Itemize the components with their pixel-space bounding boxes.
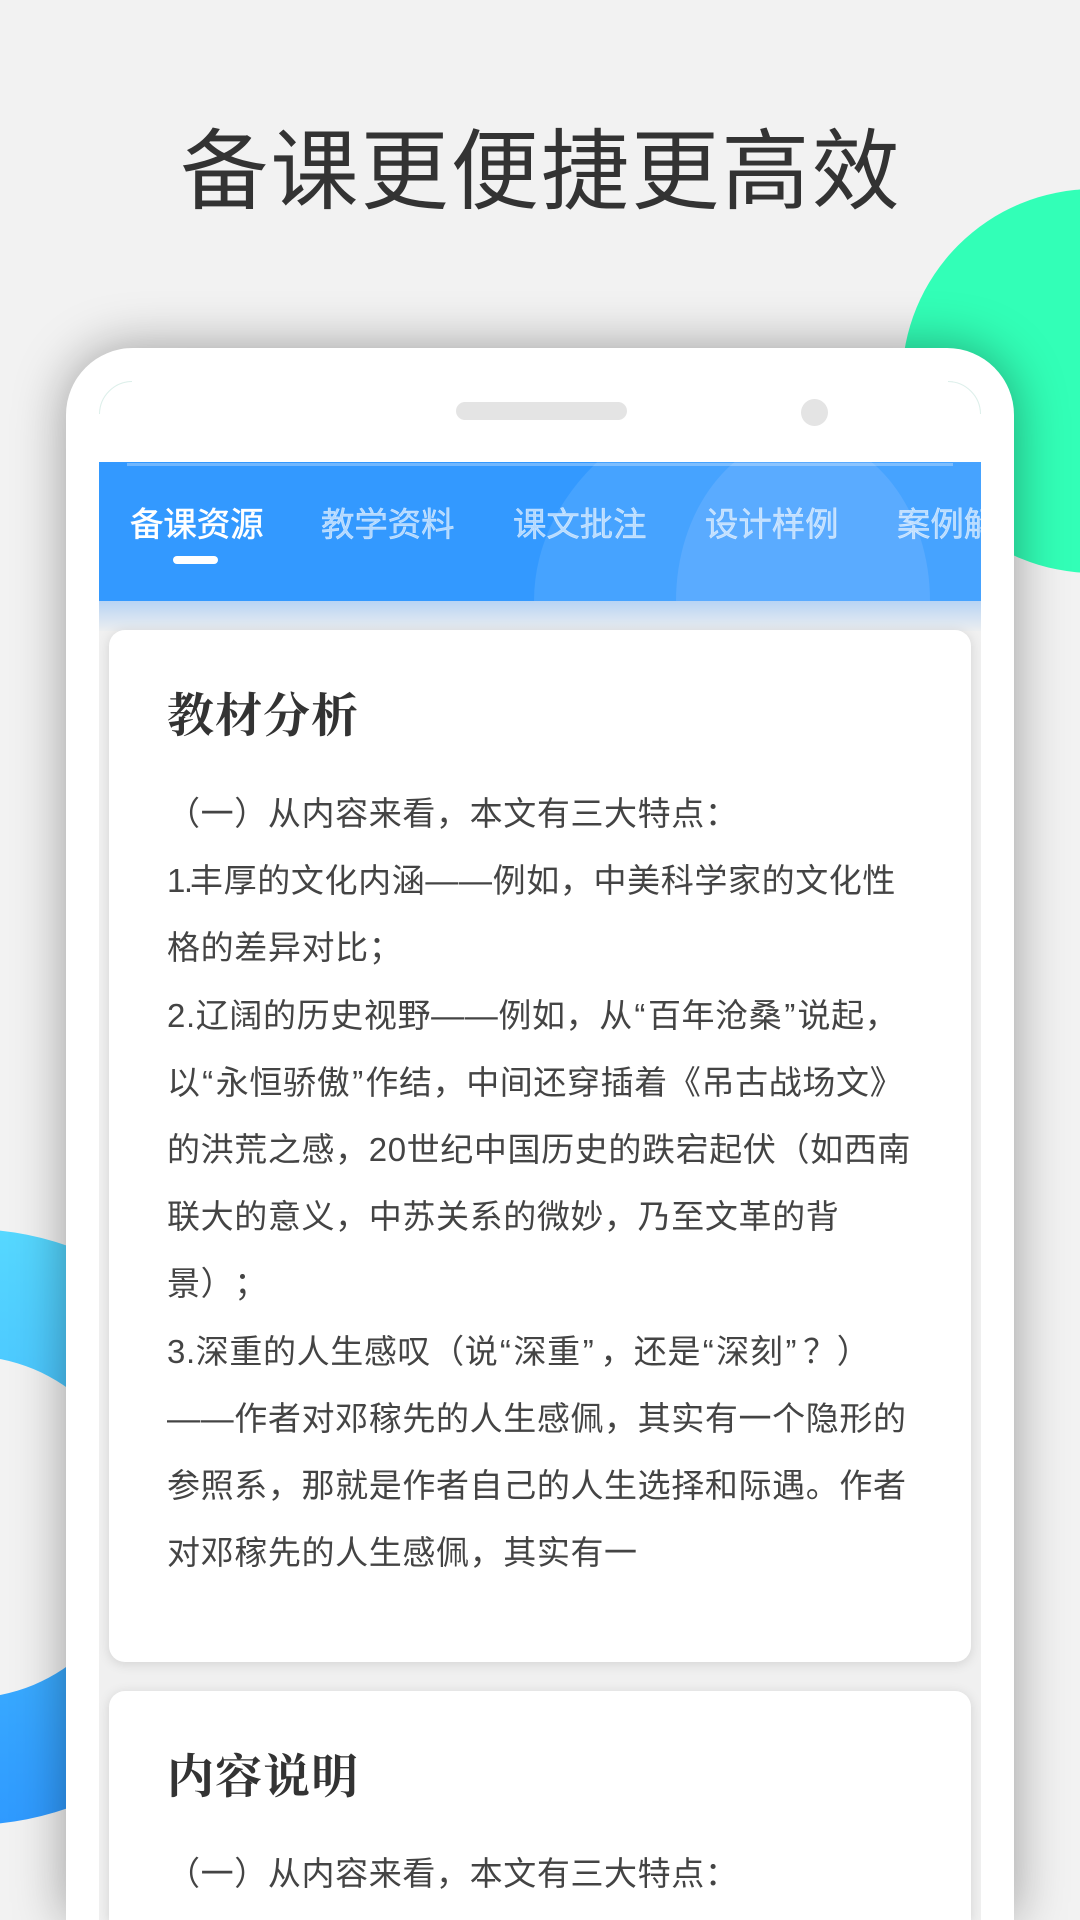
- phone screen: [99, 381, 981, 1920]
- body text: 以“永恒骄傲”作结，中间还穿插着《吊古战场文》: [167, 1064, 903, 1101]
- active tab: 备课资源: [130, 507, 264, 544]
- tab bar shadow: [99, 601, 981, 631]
- body text: 1.丰厚的文化内涵——例如，中美科学家的文化性: [167, 862, 896, 899]
- panel: textbook analysis: [109, 630, 971, 1662]
- body text: （一）从内容来看，本文有三大特点：: [167, 1855, 739, 1892]
- panel: content description: [109, 1691, 971, 1920]
- body text: 景）；: [167, 1265, 268, 1302]
- heading: 教材分析: [167, 691, 359, 743]
- screen corner hairlines: [99, 381, 981, 414]
- green circle: [902, 189, 1080, 573]
- body text: 3.深重的人生感叹（说“深重”，还是“深刻”？）: [167, 1333, 870, 1370]
- tab: 教学资料: [321, 507, 455, 544]
- phone mockup: [66, 348, 1014, 1920]
- body text: （一）从内容来看，本文有三大特点：: [167, 795, 739, 832]
- blue tab bar: [99, 462, 981, 601]
- status area with speaker and camera: [99, 381, 981, 462]
- body text: ——作者对邓稼先的人生感佩，其实有一个隐形的: [167, 1400, 907, 1437]
- heading: 内容说明: [167, 1752, 359, 1804]
- tab: 设计样例: [705, 507, 839, 544]
- camera: [801, 399, 828, 426]
- body text: 格的差异对比；: [167, 929, 402, 966]
- body text: [167, 795, 911, 1571]
- title: 备课更便捷更高效: [180, 122, 902, 221]
- tab: 课文批注: [513, 507, 647, 544]
- body text: 2.辽阔的历史视野——例如，从“百年沧桑”说起，: [167, 997, 898, 1034]
- active tab indicator: [173, 556, 218, 564]
- body text: 参照系，那就是作者自己的人生选择和际遇。作者: [167, 1467, 907, 1504]
- speaker: [456, 402, 627, 420]
- blue ring: [0, 1229, 267, 1825]
- body text: 的洪荒之感，20世纪中国历史的跌宕起伏（如西南: [167, 1131, 911, 1168]
- body text: 对邓稼先的人生感佩，其实有一: [167, 1534, 638, 1571]
- body text: 联大的意义，中苏关系的微妙，乃至文革的背: [167, 1198, 839, 1235]
- tab bar background shapes: [127, 462, 981, 601]
